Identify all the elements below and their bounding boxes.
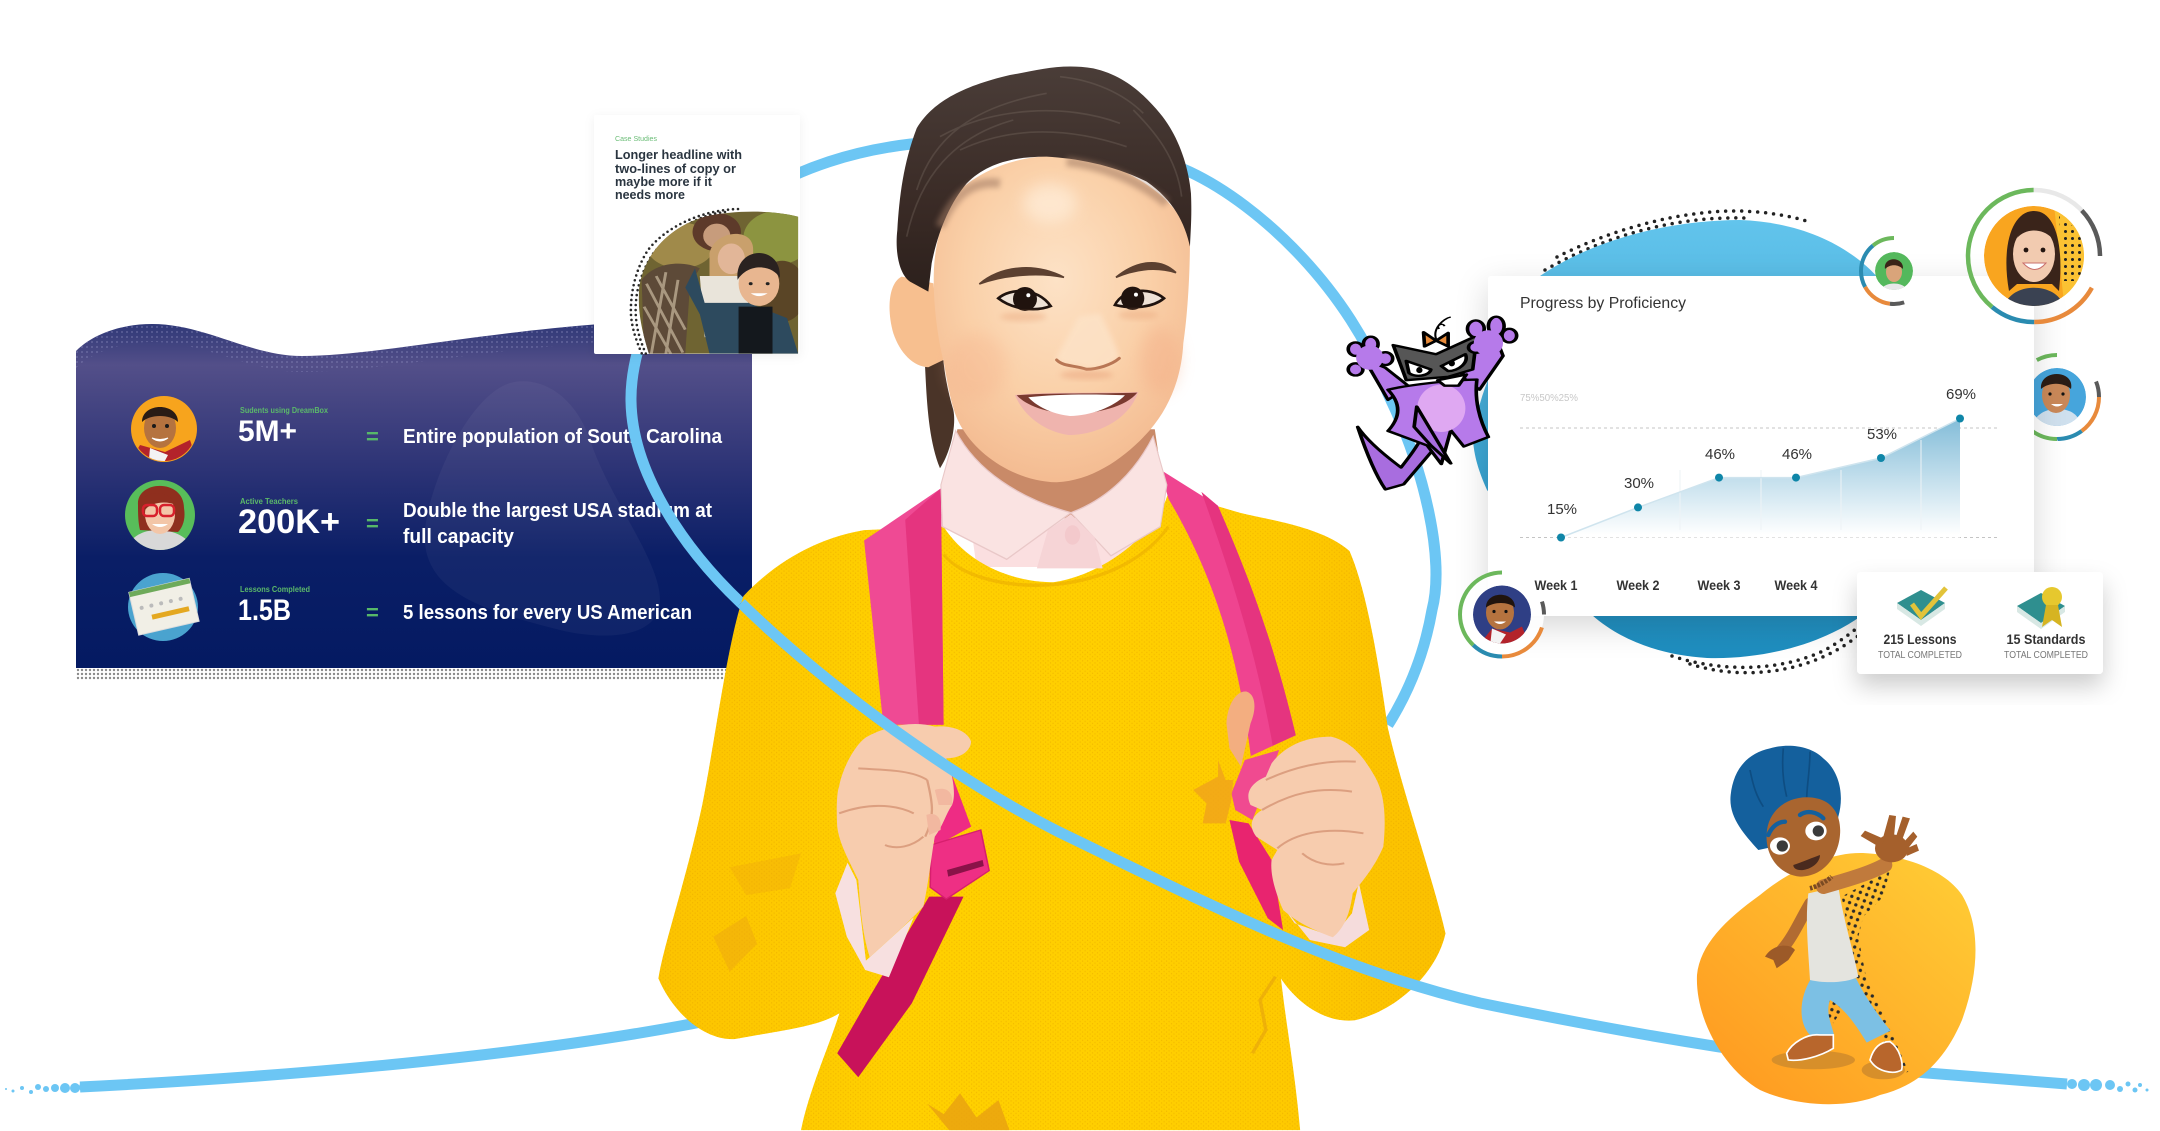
dot arc bottom xyxy=(1672,600,1885,667)
small avatar rings xyxy=(1861,238,1927,304)
eyebrow: Case Studies xyxy=(615,136,657,143)
left hand xyxy=(837,724,971,957)
curve left baseline xyxy=(80,1002,800,1087)
label: students: Sudents using DreamBox xyxy=(240,406,328,415)
right hand xyxy=(1248,737,1385,937)
data labels: 30% xyxy=(1624,475,1654,492)
photo dot halo xyxy=(631,209,738,354)
monster antenna xyxy=(1435,317,1451,339)
left eyebrow xyxy=(979,268,1064,284)
jacket avatar face xyxy=(1473,586,1531,646)
value: 5M+: 5M+ xyxy=(238,415,297,448)
value: 1.5B: 1.5B xyxy=(238,594,291,627)
data labels xyxy=(1547,386,1976,518)
collar xyxy=(941,431,1167,568)
card background xyxy=(594,115,800,354)
lower hand xyxy=(1765,946,1795,968)
chart grid lines xyxy=(1520,428,2000,538)
nose xyxy=(1056,313,1119,380)
curve end dots right xyxy=(2067,1079,2148,1092)
right cuff xyxy=(1283,883,1369,947)
orange blob xyxy=(1697,853,1976,1104)
hair strands xyxy=(907,77,1182,237)
week labels xyxy=(1534,577,1818,593)
avatar: small top boy xyxy=(1859,236,1913,306)
dotted band on wave edge xyxy=(76,324,600,372)
dot arc top second row xyxy=(1545,218,1745,270)
strap right upper xyxy=(1160,470,1296,756)
chart line xyxy=(1561,418,1960,538)
girl head xyxy=(890,67,1191,482)
face shape xyxy=(934,156,1190,482)
eye socket shadow right xyxy=(1118,310,1158,320)
stats background xyxy=(1857,572,2103,674)
avatar right rings xyxy=(2015,355,2099,439)
halftone shadow xyxy=(1822,870,1908,1075)
left shoe xyxy=(1787,1035,1833,1060)
equals 1: = xyxy=(366,424,379,449)
right eyebrow xyxy=(1116,263,1176,277)
large avatar rings xyxy=(1968,190,2100,322)
monster left arm xyxy=(1364,359,1409,400)
data labels: 15% xyxy=(1547,501,1577,518)
value: 200K+: 200K+ xyxy=(238,503,340,541)
photo: children with parent xyxy=(638,212,798,354)
case study card xyxy=(594,136,800,355)
icon: book with check xyxy=(1897,588,1946,626)
monster belly claw xyxy=(1414,407,1451,463)
week labels: Week 4 xyxy=(1774,577,1818,593)
necklace xyxy=(1810,877,1832,888)
equals 2: = xyxy=(366,511,379,536)
large avatar face xyxy=(1984,206,2084,306)
chart title: Progress by Proficiency xyxy=(1520,295,1686,312)
comparison 2 xyxy=(403,500,712,548)
raised arm xyxy=(1823,865,1885,887)
ponytail xyxy=(925,360,954,468)
avatar: student xyxy=(131,396,197,462)
icon: book with ribbon xyxy=(2017,587,2065,629)
right thumb xyxy=(1226,692,1254,767)
sweater xyxy=(658,492,1445,1130)
chart area xyxy=(1561,418,1960,538)
buckle left xyxy=(930,830,989,899)
blue blob xyxy=(1473,220,1880,658)
blue circle behind chart xyxy=(1473,211,1890,673)
raised hand xyxy=(1861,815,1919,862)
strap left upper xyxy=(864,488,944,725)
data points xyxy=(1557,414,1964,542)
week labels: Week 3 xyxy=(1698,577,1741,593)
headline: two-lines of copy or xyxy=(615,161,736,176)
monster body xyxy=(1388,380,1488,464)
eyes xyxy=(1770,822,1827,855)
comparison 1: Entire population of South Carolina xyxy=(403,426,723,448)
forehead highlight xyxy=(1023,183,1077,223)
blue curve back section xyxy=(80,137,1436,1087)
avatar: large girl xyxy=(1968,190,2100,322)
lower arm xyxy=(1782,903,1810,950)
hair xyxy=(897,67,1191,292)
strap lower left xyxy=(837,897,964,1077)
comparison 2: Double the largest USA stadium at xyxy=(403,500,712,522)
girl hands and lower straps xyxy=(835,692,1385,1077)
stats card xyxy=(1857,572,2103,674)
panel wave background xyxy=(76,318,752,668)
small avatar face xyxy=(1875,252,1913,291)
equals 3: = xyxy=(366,600,379,625)
cheek blush left xyxy=(947,333,1007,400)
data labels: 46% xyxy=(1782,446,1812,463)
label: lessons: Lessons Completed xyxy=(240,585,310,594)
lessons caption: TOTAL COMPLETED xyxy=(1878,649,1962,661)
monster eyes xyxy=(1406,354,1466,376)
buckle left slot xyxy=(947,860,984,877)
ear xyxy=(890,277,943,367)
eyebrows xyxy=(1768,812,1823,835)
purple monster character xyxy=(1348,317,1517,489)
girl with backpack xyxy=(658,67,1445,1130)
monster bow xyxy=(1424,332,1448,346)
monster mask xyxy=(1393,336,1477,380)
avatar: boy in red jacket xyxy=(1460,572,1544,656)
eye socket shadow left xyxy=(1000,312,1047,321)
cheek blush right xyxy=(1140,327,1180,393)
dot arc bottom second row xyxy=(1690,605,1890,673)
monster chest emblem xyxy=(1417,385,1465,432)
data labels: 46% xyxy=(1705,446,1735,463)
character xyxy=(1730,746,1919,1079)
faint blob in panel xyxy=(425,381,660,636)
jacket avatar rings xyxy=(1460,572,1544,656)
data labels: 69% xyxy=(1946,386,1976,403)
ground shadows xyxy=(1772,1051,1855,1069)
standards value: 15 Standards xyxy=(2006,631,2086,647)
embroidered flower right xyxy=(1193,760,1233,823)
girl body xyxy=(658,429,1445,1130)
monster right arm xyxy=(1461,342,1503,390)
mouth xyxy=(1015,392,1138,435)
right eye xyxy=(1115,287,1164,310)
comparison 3: 5 lessons for every US American xyxy=(403,602,692,624)
week labels: Week 1 xyxy=(1534,577,1578,593)
panel: progress chart xyxy=(1488,276,2034,616)
ground shadow right xyxy=(1862,1061,1905,1079)
avatar right face xyxy=(2034,368,2086,426)
neck xyxy=(949,429,1163,520)
axis labels: 75%50%25% xyxy=(1520,393,1578,404)
week labels: Week 2 xyxy=(1616,577,1660,593)
head xyxy=(1767,797,1840,877)
strap right lower xyxy=(1229,820,1283,930)
left cuff xyxy=(835,863,914,977)
chart vertical grid lines xyxy=(1680,440,1921,530)
hair ridges xyxy=(1750,748,1810,807)
shirt base xyxy=(971,527,1147,567)
data labels: 53% xyxy=(1867,426,1897,443)
avatar: teacher xyxy=(125,480,195,552)
left eye xyxy=(998,287,1051,311)
headline: Longer headline with xyxy=(615,147,742,162)
curve loop xyxy=(631,137,1436,725)
monster right hand xyxy=(1467,317,1517,356)
panel: DreamBox stats xyxy=(76,318,752,680)
lessons value: 215 Lessons xyxy=(1884,631,1957,647)
headline: maybe more if it xyxy=(615,174,713,189)
monster left hand xyxy=(1348,337,1393,376)
curve end dots left xyxy=(5,1082,89,1094)
headline: needs more xyxy=(615,187,685,202)
dot arc top xyxy=(1557,211,1810,257)
label: teachers: Active Teachers xyxy=(240,497,299,506)
dotted strip below panel xyxy=(76,668,744,680)
right shoe xyxy=(1870,1042,1902,1072)
pants xyxy=(1802,978,1891,1043)
hair xyxy=(1730,746,1841,850)
icon: lesson screenshot xyxy=(128,573,199,641)
blue curve front section xyxy=(741,603,2067,1084)
standards caption: TOTAL COMPLETED xyxy=(2004,649,2088,661)
buckle right xyxy=(1231,750,1279,820)
mouth xyxy=(1793,855,1820,870)
comparison 2: full capacity xyxy=(403,526,515,548)
chart card xyxy=(1488,276,2034,616)
headline xyxy=(615,147,742,202)
monster tail xyxy=(1358,427,1432,489)
orange blob with avatar boy xyxy=(1697,746,1976,1104)
hairline soft edge xyxy=(940,162,1167,227)
shirt xyxy=(1807,887,1858,982)
monster teeth xyxy=(1438,374,1466,386)
avatar behind chart: boy on right xyxy=(2034,353,2101,441)
embroidered stem xyxy=(1252,977,1275,1053)
strap middle left xyxy=(923,760,971,847)
